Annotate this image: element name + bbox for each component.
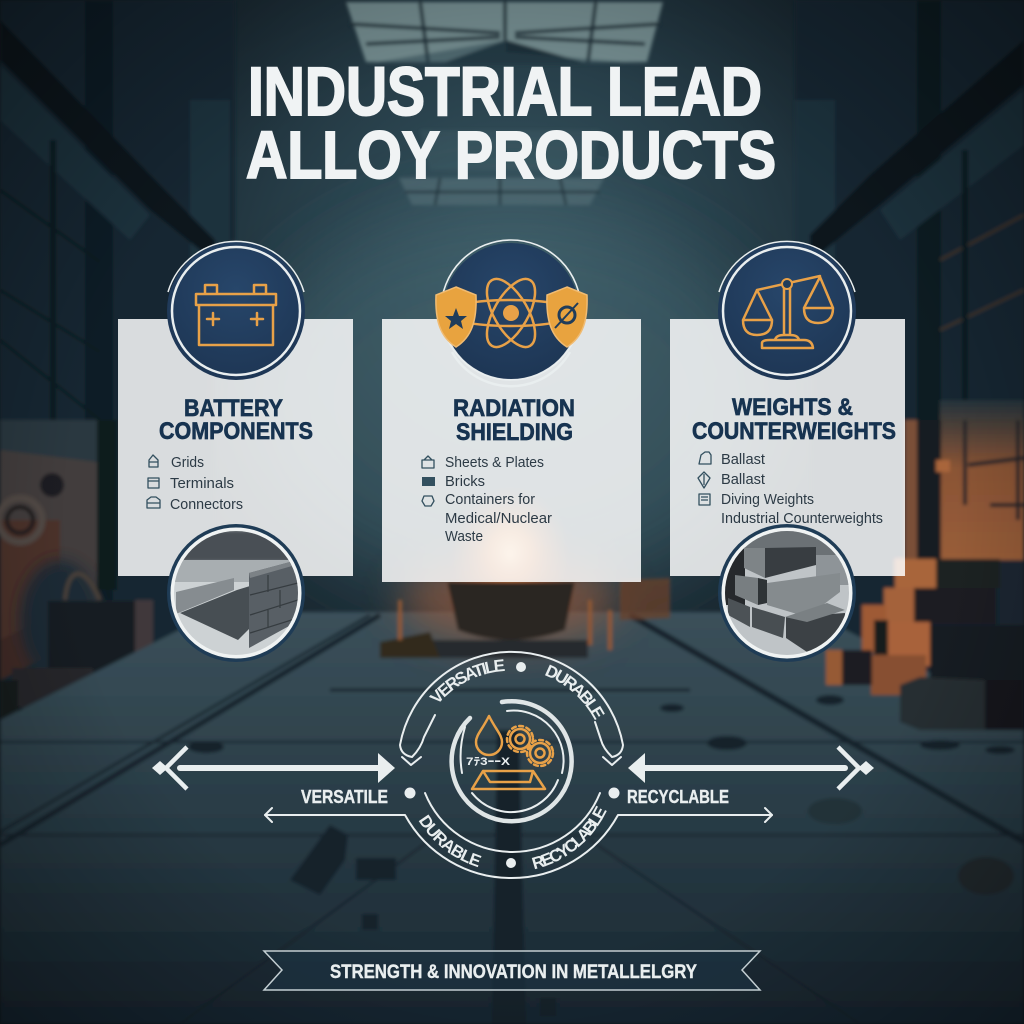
list with icons: Ballast bbox=[721, 452, 765, 468]
heading bbox=[453, 395, 575, 446]
icon: drop, gears and ingot bbox=[472, 716, 553, 789]
heading: RADIATION bbox=[453, 395, 575, 422]
list with icons: Medical/Nuclear bbox=[445, 511, 552, 527]
list with icons bbox=[147, 455, 243, 513]
list with icons: Connectors bbox=[170, 497, 243, 513]
icon badge: battery bbox=[167, 241, 305, 380]
list with icons: Grids bbox=[171, 455, 204, 471]
skylight bbox=[346, 0, 663, 205]
list with icons: Waste bbox=[445, 529, 483, 545]
heading: SHIELDING bbox=[456, 419, 573, 446]
list with icons: Terminals bbox=[170, 476, 234, 492]
curved labels bbox=[418, 659, 607, 870]
banner: STRENGTH & INNOVATION IN METALLELGRY bbox=[330, 962, 697, 983]
right wall bbox=[795, 0, 1024, 700]
furnace and fire bbox=[380, 485, 670, 658]
panel: weights and counterweights bbox=[670, 241, 905, 576]
heading bbox=[692, 394, 896, 445]
banner bbox=[264, 951, 760, 990]
title bbox=[246, 53, 776, 193]
photo circle: lead sheets and bricks bbox=[167, 524, 305, 662]
curved labels: VERSATILE bbox=[429, 659, 505, 702]
panel: radiation shielding bbox=[382, 240, 641, 582]
left wall machinery bbox=[0, 420, 153, 760]
curved labels: RECYCLABLE bbox=[532, 806, 607, 870]
inner rings bbox=[452, 701, 572, 821]
list with icons: Ballast bbox=[721, 472, 765, 488]
floor debris bbox=[188, 695, 1015, 1016]
icon badge: balance scales bbox=[718, 241, 856, 380]
list with icons: Diving Weights bbox=[721, 492, 814, 508]
heading: COMPONENTS bbox=[159, 418, 313, 445]
arrow: left large double-ended bbox=[152, 747, 395, 789]
lower band and thin arrows bbox=[265, 793, 772, 878]
list with icons: Containers for bbox=[445, 492, 535, 508]
heading: COUNTERWEIGHTS bbox=[692, 418, 896, 445]
floor bbox=[0, 612, 1024, 1024]
heading: WEIGHTS & bbox=[732, 394, 853, 421]
curved labels: DURABLE bbox=[418, 814, 482, 868]
panel: battery components bbox=[118, 241, 353, 576]
list with icons bbox=[422, 455, 552, 545]
back hall glow bbox=[252, 210, 772, 590]
title: INDUSTRIAL LEAD bbox=[248, 53, 762, 130]
arrow: right large double-ended bbox=[628, 747, 874, 789]
heading bbox=[159, 395, 313, 445]
photo circle: stacked lead blocks bbox=[718, 524, 856, 662]
upper band bbox=[400, 652, 623, 765]
label: recyclable: RECYCLABLE bbox=[627, 787, 729, 807]
left wall bbox=[0, 0, 235, 700]
list with icons: Sheets & Plates bbox=[445, 455, 544, 471]
list with icons bbox=[698, 452, 883, 527]
heading: BATTERY bbox=[184, 395, 283, 422]
list with icons: Bricks bbox=[445, 474, 485, 490]
label: versatile: VERSATILE bbox=[301, 787, 388, 807]
icon badge: atom with shields bbox=[436, 240, 587, 386]
dots bbox=[404, 662, 620, 868]
title: ALLOY PRODUCTS bbox=[246, 118, 776, 193]
emblem garbled label: 7ﾃ3ｰｰX bbox=[466, 755, 511, 768]
floor lines bbox=[0, 615, 1024, 1024]
list with icons: Industrial Counterweights bbox=[721, 511, 883, 527]
central emblem bbox=[264, 650, 773, 879]
curved labels: DURABLE bbox=[545, 664, 605, 720]
right wall and stairs bbox=[826, 400, 1024, 730]
